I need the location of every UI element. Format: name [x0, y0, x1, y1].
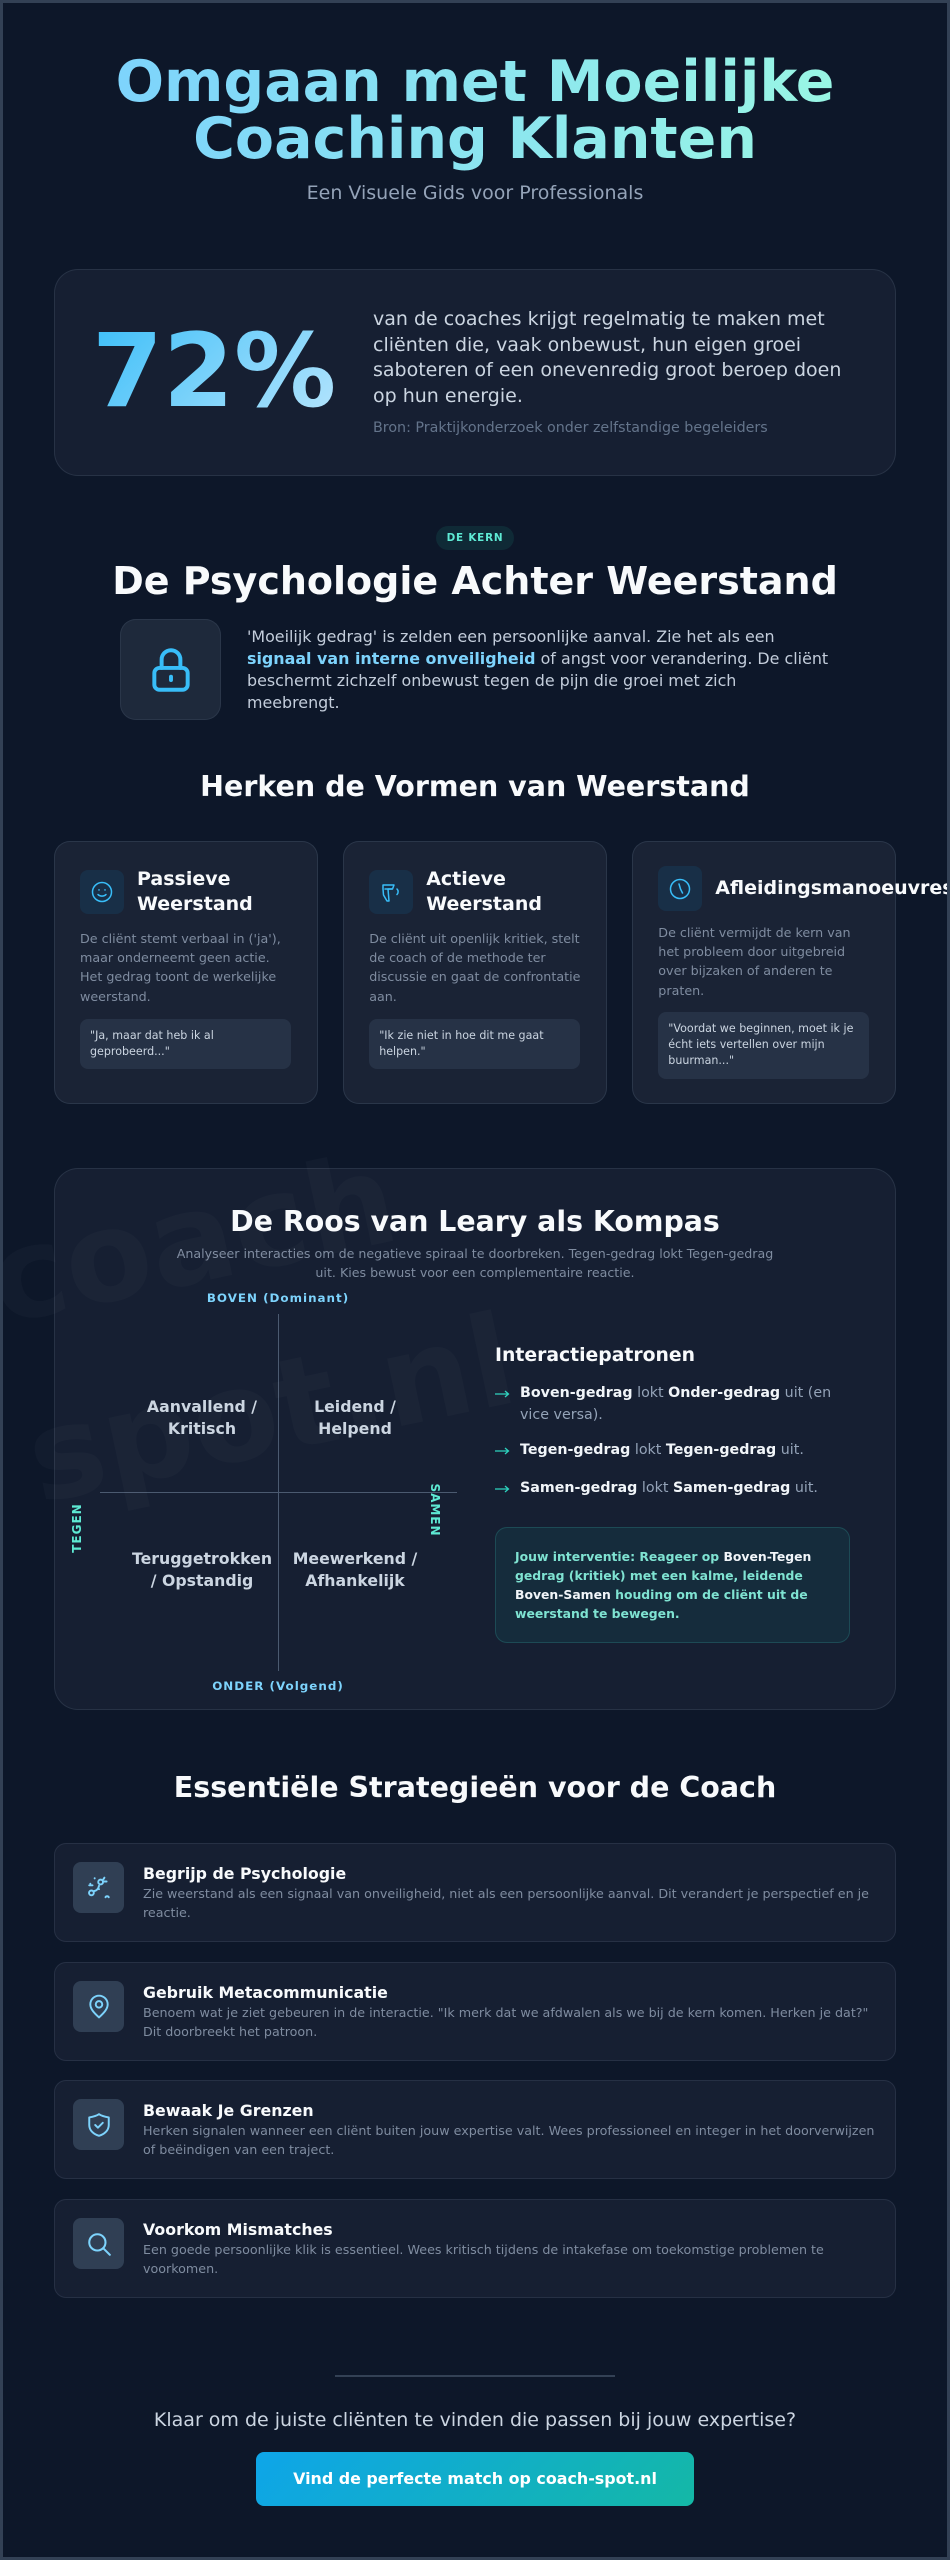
callout: interventie: [495, 1527, 850, 1643]
axis label right: SAMEN: [428, 1483, 442, 1537]
axis label bottom: ONDER (Volgend): [212, 1679, 344, 1693]
card description: [369, 931, 580, 1004]
callout text: [514, 1549, 811, 1621]
core text: [247, 627, 828, 712]
card title: Weerstand: [426, 892, 542, 914]
quadrant: bottom left: / Opstandig: [151, 1571, 253, 1590]
pattern text: [520, 1385, 831, 1423]
icon: smile: [80, 870, 124, 914]
core text: signaal van interne onveiligheid of angst voor verandering. De cliënt: [247, 649, 828, 668]
card title: [426, 868, 542, 914]
card title: [137, 868, 253, 914]
pattern text: Boven-gedrag lokt Onder-gedrag uit (en: [520, 1385, 831, 1401]
callout text: gedrag (kritiek) met een kalme, leidende: [515, 1568, 803, 1583]
title: Omgaan met Moeilijke: [116, 49, 834, 115]
arrow: [495, 1448, 510, 1454]
quote: [80, 1019, 291, 1069]
horizontal axis: [100, 1492, 457, 1493]
strategy description: voorkomen.: [143, 2261, 218, 2276]
strategy: bewaak je grenzen: [54, 2080, 896, 2179]
strategy description: reactie.: [143, 1905, 191, 1920]
strategy title: Bewaak Je Grenzen: [143, 2101, 314, 2120]
strategy: voorkom mismatches: [54, 2199, 896, 2298]
card description: weerstand.: [80, 989, 151, 1004]
card description: praten.: [658, 983, 704, 998]
quote: geprobeerd...": [90, 1044, 170, 1058]
strategy description: Dit doorbreekt het patroon.: [143, 2024, 317, 2038]
quadrant: bottom right: [293, 1549, 418, 1590]
strategy: begrijp de psychologie: [54, 1843, 896, 1942]
statistic text: [373, 308, 841, 406]
statistic text: saboteren of een onevenredig groot beroep doen: [373, 359, 841, 381]
leary intro text: [176, 1246, 773, 1280]
icon: lock: [120, 619, 221, 720]
strategy description: [143, 2242, 824, 2276]
source: Bron: Praktijkonderzoek onder zelfstandige begeleiders: [373, 420, 768, 436]
strategy title: Gebruik Metacommunicatie: [143, 1982, 388, 2002]
quote: helpen.": [379, 1044, 426, 1058]
card description: maar onderneemt geen actie.: [80, 950, 270, 965]
panel: passieve weerstand: [54, 841, 318, 1104]
leary intro text: uit. Kies bewust voor een complementaire reactie.: [315, 1265, 635, 1280]
leary intro text: Analyseer interacties om de negatieve spiraal te doorbreken. Tegen-gedrag lokt Tegen-gedrag: [177, 1246, 773, 1261]
icon: search: [73, 2218, 124, 2269]
vertical axis: [278, 1314, 279, 1671]
card title: Weerstand: [137, 892, 253, 914]
icon: brain nodes: [73, 1862, 124, 1913]
card description: [80, 931, 281, 1004]
button: call to action: [256, 2452, 694, 2506]
quadrant: bottom right: Afhankelijk: [305, 1571, 405, 1590]
card description: De cliënt uit openlijk kritiek, stelt: [369, 931, 580, 946]
quote: "Ik zie niet in hoe dit me gaat: [379, 1028, 544, 1042]
subtitle: Een Visuele Gids voor Professionals: [307, 182, 643, 204]
card title: Actieve: [426, 868, 506, 890]
footer text: Klaar om de juiste cliënten te vinden die passen bij jouw expertise?: [154, 2409, 796, 2431]
badge: de kern: DE KERN: [447, 532, 503, 544]
heading: interactiepatronen: Interactiepatronen: [495, 1345, 695, 1366]
card description: Het gedrag toont de werkelijke: [80, 969, 276, 984]
card title: Passieve: [137, 868, 231, 890]
panel: afleidingsmanoeuvres: [632, 841, 896, 1104]
pattern text: Tegen-gedrag lokt Tegen-gedrag uit.: [520, 1442, 804, 1458]
card description: [658, 925, 851, 998]
strategy title: Begrijp de Psychologie: [143, 1864, 346, 1883]
icon: location pin: [73, 1980, 124, 2032]
core text: 'Moeilijk gedrag' is zelden een persoonlijke aanval. Zie het als een: [247, 627, 775, 646]
card title: Afleidingsmanoeuvres: [715, 877, 950, 899]
arrow: [495, 1390, 510, 1398]
strategy: gebruik metacommunicatie: [54, 1962, 896, 2060]
pattern text: vice versa).: [520, 1407, 603, 1423]
card description: het probleem door uitgebreid: [658, 944, 845, 959]
arrow: [495, 1486, 510, 1492]
quadrant: top left: Aanvallend /: [147, 1396, 257, 1416]
big number: 72%: [92, 312, 336, 431]
core text: beschermt zichzelf onbewust tegen de pijn die groei met zich: [247, 671, 736, 690]
strategy description: Zie weerstand als een signaal van onveiligheid, niet als een persoonlijke aanval. Dit verandert je perspectief en je: [143, 1886, 869, 1901]
quadrant: bottom left: [132, 1549, 272, 1590]
axis label top: BOVEN (Dominant): [207, 1291, 349, 1305]
quote: buurman...": [668, 1054, 734, 1066]
strategy description: Een goede persoonlijke klik is essentieel. Wees kritisch tijdens de intakefase om toekomstige problemen te: [143, 2242, 824, 2257]
title: [110, 54, 840, 180]
quote: [658, 1012, 869, 1079]
card description: aan.: [369, 989, 397, 1004]
watermark: spot.nl: [15, 1286, 527, 1532]
statistic text: cliënten die, vaak onbewust, hun eigen groei: [373, 334, 801, 356]
strategy description: Herken signalen wanneer een cliënt buiten jouw expertise valt. Wees professioneel en integer in het doorverwijzen: [143, 2123, 874, 2138]
strategy title: Voorkom Mismatches: [143, 2220, 333, 2239]
pattern text: Samen-gedrag lokt Samen-gedrag uit.: [520, 1480, 818, 1496]
heading: psychologie: De Psychologie Achter Weerstand: [112, 559, 838, 603]
strategy description: [143, 2004, 868, 2038]
badge: de kern: [436, 526, 514, 550]
core text: meebrengt.: [247, 693, 340, 712]
icon: shield check: [73, 2099, 124, 2150]
quadrant: top left: [147, 1396, 257, 1438]
title: Coaching Klanten: [193, 106, 757, 172]
pattern 1: [495, 1385, 831, 1423]
card description: over bijzaken of anderen te: [658, 963, 832, 978]
watermark: [0, 1090, 531, 1550]
quadrant: top right: [314, 1396, 396, 1438]
quote: "Voordat we beginnen, moet ik je: [668, 1022, 853, 1034]
chart: leary quadrant: [70, 1291, 457, 1693]
panel: statistic: [54, 269, 896, 476]
card description: discussie en gaat de confrontatie: [369, 969, 580, 984]
quadrant: bottom left: Teruggetrokken: [132, 1549, 272, 1568]
icon: clock: [658, 866, 702, 911]
statistic text: op hun energie.: [373, 384, 523, 406]
quadrant: top left: Kritisch: [168, 1418, 236, 1438]
button: call to action: Vind de perfecte match op coach-spot.nl: [293, 2469, 657, 2488]
pattern 3: [495, 1480, 818, 1496]
strategy description: [143, 2123, 874, 2157]
callout text: weerstand te bewegen.: [515, 1606, 680, 1621]
quadrant: top right: Helpend: [318, 1418, 392, 1438]
strategy description: Benoem wat je ziet gebeuren in de interactie. "Ik merk dat we afdwalen als we bij de kern komen. Herken je dat?": [143, 2004, 868, 2020]
axis label left: TEGEN: [70, 1503, 84, 1553]
card description: De cliënt vermijdt de kern van: [658, 925, 851, 940]
quadrant: top right: Leidend /: [314, 1396, 396, 1416]
strategy description: [143, 1886, 869, 1920]
panel: actieve weerstand: [343, 841, 607, 1104]
heading: vormen: Herken de Vormen van Weerstand: [200, 770, 750, 802]
pattern 2: [495, 1442, 804, 1458]
heading: roos van leary: De Roos van Leary als Kompas: [230, 1205, 720, 1238]
quote: écht iets vertellen over mijn: [668, 1038, 825, 1050]
panel: roos van leary: [54, 1168, 896, 1710]
heading: strategieen: Essentiële Strategieën voor de Coach: [174, 1771, 776, 1804]
statistic text: van de coaches krijgt regelmatig te maken met: [373, 308, 825, 330]
card description: De cliënt stemt verbaal in ('ja'),: [80, 931, 281, 946]
quote: [369, 1019, 580, 1069]
strategy description: of beëindigen van een traject.: [143, 2142, 334, 2157]
card description: de coach of de methode ter: [369, 950, 546, 965]
quote: "Ja, maar dat heb ik al: [90, 1028, 214, 1042]
callout text: Boven-Samen houding om de cliënt uit de: [515, 1587, 808, 1602]
icon: pointing hand: [369, 870, 413, 914]
callout text: Jouw interventie: Reageer op Boven-Tegen: [515, 1549, 811, 1564]
quadrant: bottom right: Meewerkend /: [293, 1549, 417, 1568]
